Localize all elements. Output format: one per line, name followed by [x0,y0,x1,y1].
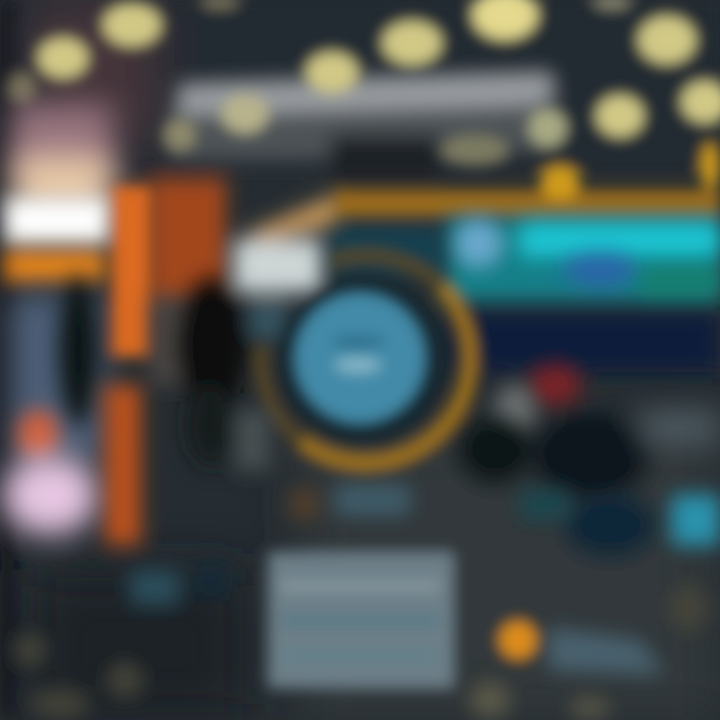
small caption blocks [130,410,410,605]
header bar [170,72,555,180]
right lower cluster [459,365,720,555]
orange column [105,178,226,545]
left glow panel [2,105,112,535]
navy band [450,312,720,372]
circular gauge [261,225,470,463]
bright centre block [234,192,340,340]
cyan band [445,218,720,302]
orange horizontal band [335,141,720,217]
orange bullet [498,620,538,660]
grey text panel [268,552,454,688]
bullet label [548,628,665,675]
decorative light dots [8,0,720,165]
faint footer dots [14,584,708,718]
dark silhouette [150,277,248,467]
